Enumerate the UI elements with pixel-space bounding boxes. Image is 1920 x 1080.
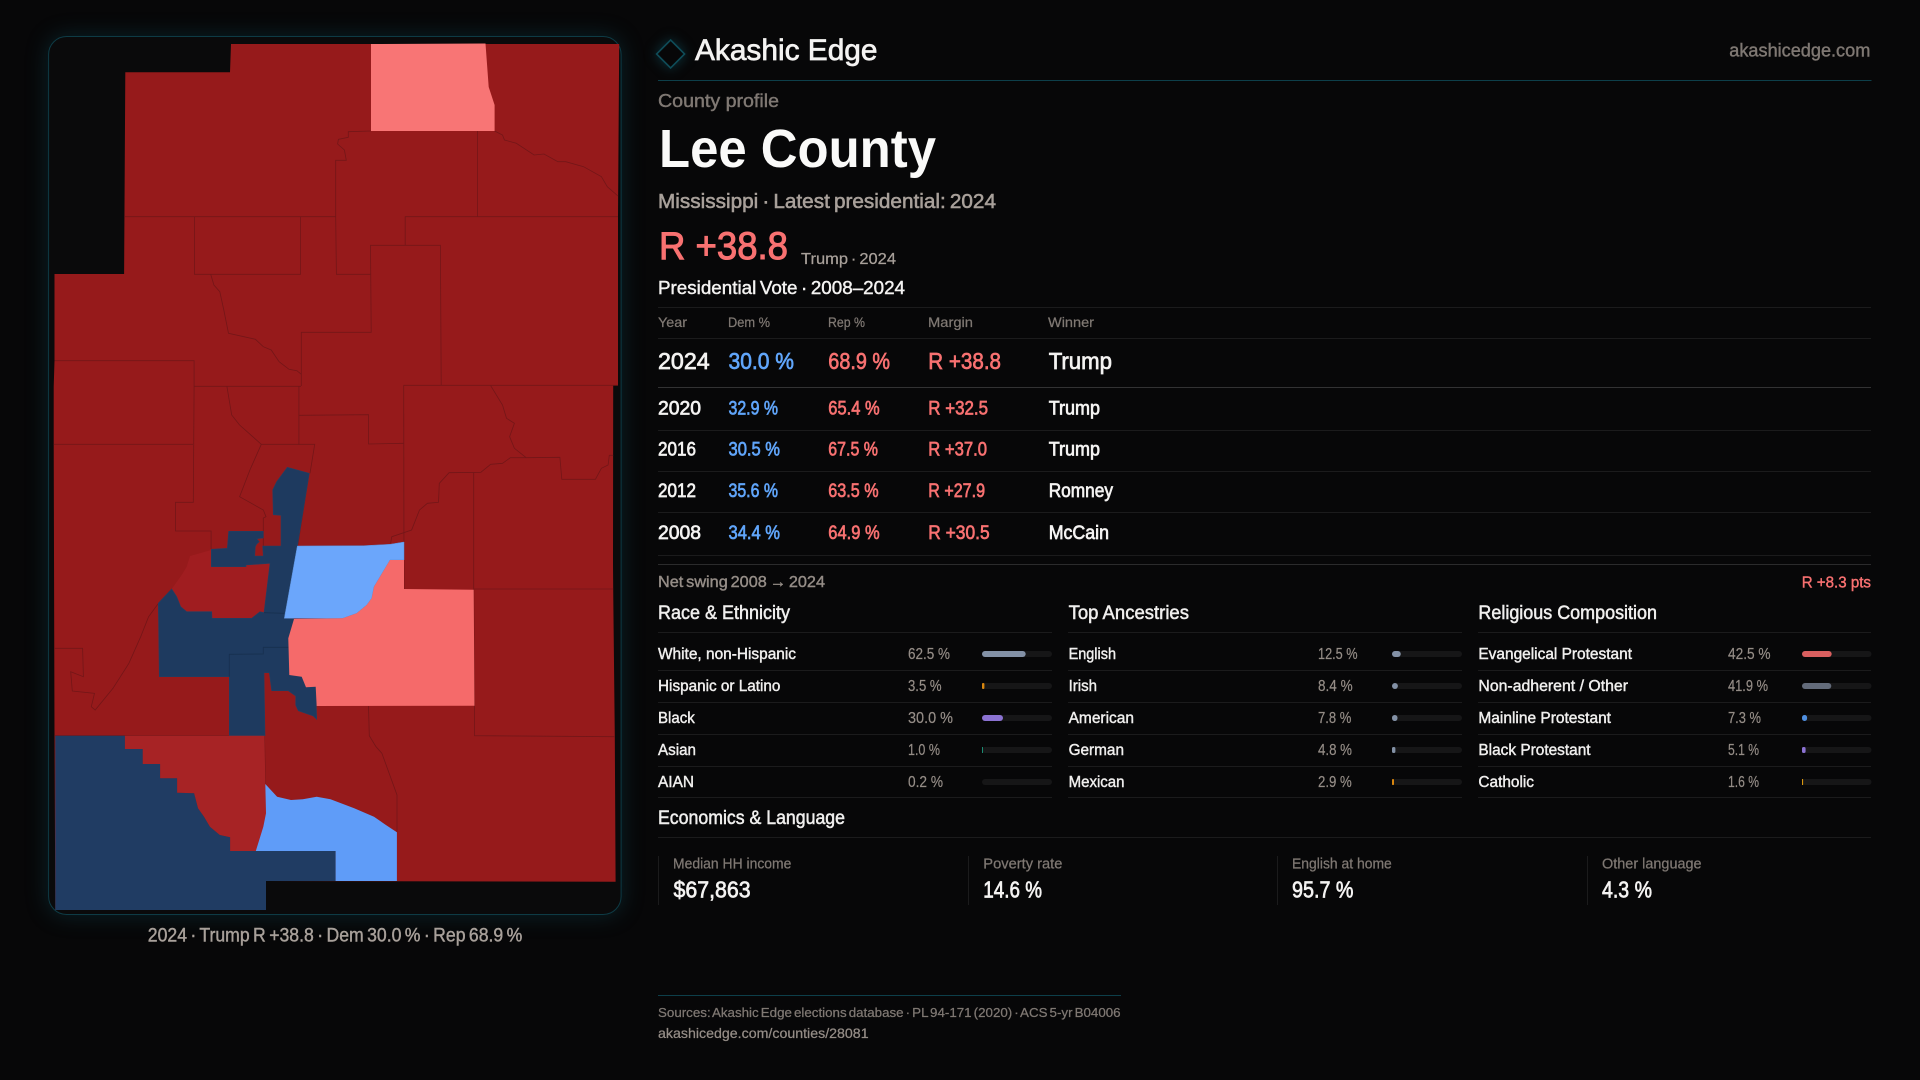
stat: poverty rate: Poverty rate (983, 856, 1062, 872)
row: mexican: 2.9 % (1318, 774, 1352, 791)
row 2012: R +27.9 (928, 480, 985, 502)
map: base red precincts (54, 44, 619, 910)
row: evangelical protestant: Evangelical Protestant (1478, 646, 1633, 663)
stat: english at home: English at home (1292, 856, 1392, 872)
row 2008: 34.4 % (728, 522, 780, 544)
row 2016: 2016 (658, 438, 696, 460)
table header (658, 314, 1094, 330)
map caption: 2024 · Trump R +38.8 · Dem 30.0 % · Rep 68.9 % (148, 926, 522, 947)
map: light red north precinct (371, 44, 495, 131)
stat: english at home (1278, 856, 1392, 905)
headline margin (659, 225, 896, 268)
panel: religious composition (1478, 603, 1872, 798)
row: asian: Asian (658, 742, 696, 759)
table: presidential vote (658, 314, 1871, 556)
row 2024: 2024 (658, 348, 710, 374)
row 2024: 30.0 % (728, 348, 794, 374)
map: south light blue precinct (256, 784, 397, 881)
panel: county map (49, 36, 621, 914)
row: german (1069, 742, 1462, 759)
row: mexican: Mexican (1069, 774, 1124, 791)
row: american (1069, 710, 1462, 727)
row: white non-hispanic: 62.5 % (908, 646, 950, 663)
panel: top ancestries (1068, 603, 1462, 798)
row 2016 (658, 438, 1100, 460)
stat: median income: $67,863 (674, 877, 751, 903)
row 2020: 65.4 % (828, 397, 880, 419)
table header: Margin (928, 314, 973, 330)
source url: akashicedge.com/counties/28081 (658, 1025, 869, 1041)
row 2024 (658, 348, 1112, 374)
stat: other language: Other language (1602, 856, 1702, 872)
map: central mid-red precinct (172, 550, 270, 618)
stat: other language: 4.3 % (1602, 877, 1652, 903)
row: mainline protestant: 7.3 % (1728, 710, 1761, 727)
row: evangelical protestant (1478, 646, 1872, 663)
row: catholic: Catholic (1478, 774, 1534, 791)
panel: race and ethnicity (658, 603, 1052, 798)
winner and year: Trump · 2024 (801, 251, 896, 268)
stat: other language (1588, 856, 1702, 905)
site link: akashicedge.com (1729, 41, 1870, 61)
stat: english at home: 95.7 % (1292, 877, 1354, 903)
row: catholic: 1.6 % (1728, 774, 1759, 791)
row: black: 30.0 % (908, 710, 953, 727)
row: black (658, 710, 1052, 727)
heading: Race & Ethnicity (658, 603, 790, 624)
row 2020: R +32.5 (928, 397, 988, 419)
table header: Rep % (828, 314, 865, 330)
row: german: 4.8 % (1318, 742, 1352, 759)
margin figure: R +38.8 (659, 225, 788, 268)
row: hispanic or latino: Hispanic or Latino (658, 678, 780, 695)
row: non-adherent (1478, 678, 1872, 695)
map: precinct borders (54, 131, 618, 832)
map: light red central precinct (288, 560, 474, 706)
row 2012: 2012 (658, 480, 696, 502)
row: hispanic or latino: 3.5 % (908, 678, 942, 695)
row 2016: R +37.0 (928, 438, 987, 460)
row: aian: AIAN (658, 774, 694, 791)
row 2024: 68.9 % (828, 348, 890, 374)
row: mexican (1069, 774, 1462, 791)
table header: Dem % (728, 314, 770, 330)
row: english (1069, 646, 1462, 663)
map: south mid-red precinct (125, 736, 266, 851)
row 2012: 63.5 % (828, 480, 879, 502)
row: irish: 8.4 % (1318, 678, 1353, 695)
row 2024: Trump (1049, 348, 1112, 374)
row 2020: Trump (1049, 397, 1100, 419)
map: central navy precincts (158, 467, 317, 736)
row: irish (1069, 678, 1462, 695)
row: aian (658, 774, 1052, 791)
row: black: Black (658, 710, 695, 727)
row 2008: R +30.5 (928, 522, 990, 544)
row 2012 (658, 480, 1113, 502)
row: non-adherent: Non-adherent / Other (1478, 678, 1628, 695)
brand name: Akashic Edge (695, 34, 878, 67)
icon: diamond logo (657, 40, 685, 68)
row 2020 (658, 397, 1100, 419)
map: light blue central precinct (284, 542, 404, 618)
row: black protestant: 5.1 % (1728, 742, 1759, 759)
heading: Economics & Language (658, 808, 845, 829)
row: english: English (1069, 646, 1116, 663)
row: catholic (1478, 774, 1872, 791)
title: Lee County (659, 119, 936, 179)
stat: median income: Median HH income (673, 856, 791, 872)
heading: Religious Composition (1478, 603, 1657, 624)
row 2024: R +38.8 (928, 348, 1001, 374)
section heading: presidential vote: Presidential Vote · 2008–2024 (658, 278, 905, 298)
header brand (657, 34, 878, 68)
net swing value: R +8.3 pts (1802, 575, 1871, 592)
row: english: 12.5 % (1318, 646, 1358, 663)
net swing row (658, 574, 1871, 592)
stat: poverty rate: 14.6 % (983, 877, 1042, 903)
stat: poverty rate (968, 856, 1062, 905)
heading: Top Ancestries (1069, 603, 1189, 624)
row 2008: 2008 (658, 522, 701, 544)
row: irish: Irish (1069, 678, 1097, 695)
row: aian: 0.2 % (908, 774, 943, 791)
row 2016: Trump (1049, 438, 1100, 460)
row: black protestant: Black Protestant (1478, 742, 1591, 759)
row: white non-hispanic (658, 646, 1052, 663)
row 2012: 35.6 % (728, 480, 778, 502)
source list: Sources: Akashic Edge elections database · PL 94-171 (2020) · ACS 5-yr B04006 (658, 1005, 1121, 1020)
row: german: German (1069, 742, 1124, 759)
row 2008: McCain (1049, 522, 1109, 544)
row 2020: 32.9 % (728, 397, 778, 419)
table header: Winner (1048, 314, 1094, 330)
row: non-adherent: 41.9 % (1728, 678, 1768, 695)
row: asian (658, 742, 1052, 759)
row: american: 7.8 % (1318, 710, 1352, 727)
row 2008: 64.9 % (828, 522, 880, 544)
row 2020: 2020 (658, 397, 701, 419)
stat: median income (658, 856, 791, 905)
row: hispanic or latino (658, 678, 1052, 695)
eyebrow: county profile: County profile (658, 91, 779, 111)
net swing label: Net swing 2008 → 2024 (658, 574, 825, 591)
map: southwest navy precinct (55, 736, 336, 910)
row: mainline protestant (1478, 710, 1872, 727)
table header: Year (658, 314, 687, 330)
panel: economics and language (658, 808, 1871, 905)
row 2016: 67.5 % (828, 438, 878, 460)
row: asian: 1.0 % (908, 742, 940, 759)
row: black protestant (1478, 742, 1872, 759)
footer: sources (658, 1005, 1121, 1041)
row: white non-hispanic: White, non-Hispanic (658, 646, 796, 663)
row: mainline protestant: Mainline Protestant (1478, 710, 1612, 727)
row: american: American (1069, 710, 1134, 727)
subtitle: Mississippi · Latest presidential: 2024 (658, 191, 996, 213)
row 2016: 30.5 % (728, 438, 780, 460)
row 2012: Romney (1049, 480, 1113, 502)
row: evangelical protestant: 42.5 % (1728, 646, 1771, 663)
row 2008 (658, 522, 1109, 544)
